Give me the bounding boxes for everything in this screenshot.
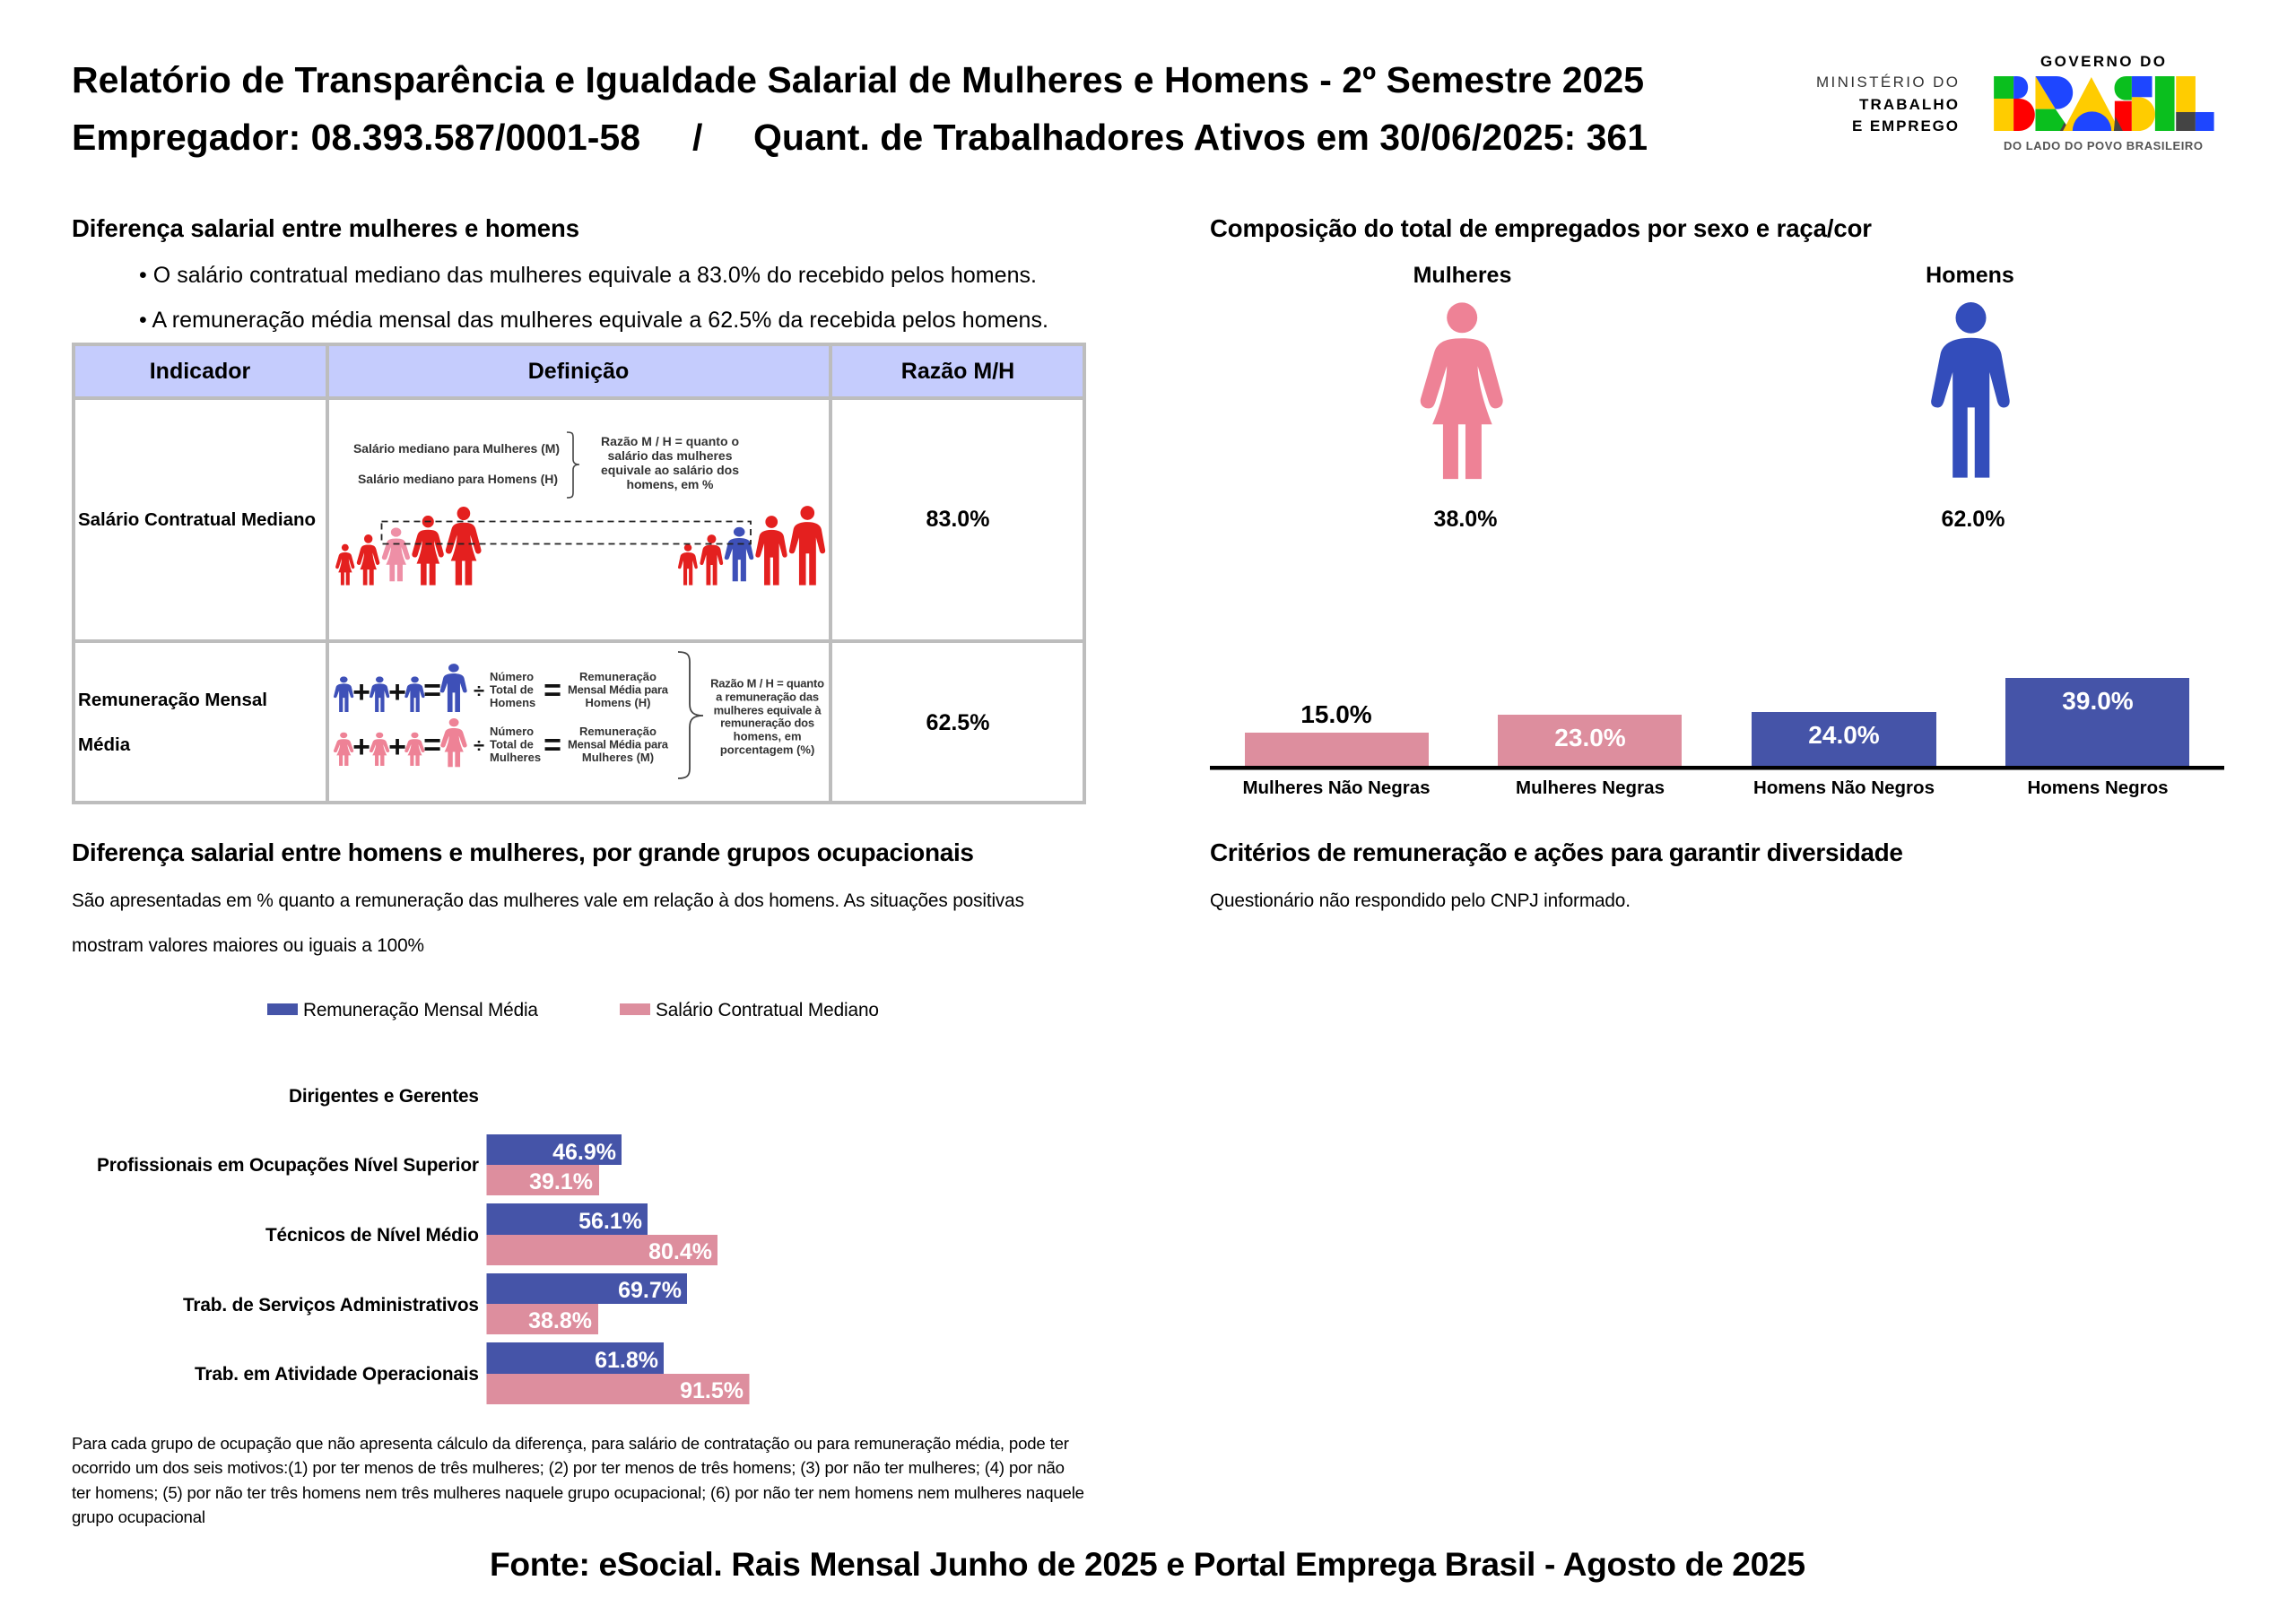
bar chart: sexo e raça/cor: Mulheres Não Negras — [1243, 777, 1430, 798]
data labels: 80.4% — [648, 1239, 712, 1264]
footnote — [72, 1434, 1084, 1526]
definition illustration: remuneração média: = — [544, 673, 561, 708]
logo: Ministério do Trabalho e Emprego / Governo do Brasil: DO LADO DO POVO BRASILEIRO — [2004, 139, 2203, 152]
heading: critérios: Critérios de remuneração e ações para garantir diversidade — [1210, 838, 1903, 866]
icon group: mulheres — [1413, 263, 1511, 532]
table header — [150, 359, 1014, 384]
definition illustration: remuneração média: remuneração dos — [720, 716, 814, 730]
bar chart: sexo e raça/cor: 15.0% — [1300, 700, 1372, 728]
definition illustration: salário mediano: Razão M / H = quanto o — [601, 434, 739, 448]
definition illustration: salário mediano: Salário mediano para Mulheres (M) — [353, 441, 560, 456]
bar chart: sexo e raça/cor: 23.0% — [1554, 724, 1626, 751]
data labels: 38.8% — [528, 1308, 592, 1333]
definition illustration: remuneração média: + — [352, 730, 370, 764]
row value: 62.5%: 62.5% — [926, 710, 989, 735]
data labels: 61.8% — [595, 1348, 658, 1373]
definition illustration: remuneração média: Mensal Média para — [568, 737, 669, 751]
definition illustration: remuneração média: + — [388, 730, 406, 764]
logo: Ministério do Trabalho e Emprego / Governo do Brasil: MINISTÉRIO DO — [1816, 74, 1958, 91]
footnote: ocorrido um dos seis motivos:(1) por ter menos de três mulheres; (2) por ter menos de três homens; (3) por não ter mulheres; (4) por não — [72, 1458, 1065, 1477]
definition illustration: remuneração média: Número — [490, 725, 534, 738]
bar chart: sexo e raça/cor — [1210, 678, 2224, 798]
definition illustration: remuneração média: ÷ — [474, 680, 484, 702]
data labels: 91.5% — [680, 1378, 744, 1403]
logo: Ministério do Trabalho e Emprego / Governo do Brasil: GOVERNO DO — [2040, 53, 2165, 70]
bars — [486, 1134, 750, 1404]
icon group: homens — [1926, 263, 2014, 532]
source line: Fonte: eSocial. Rais Mensal Junho de 2025 e Portal Emprega Brasil - Agosto de 2025 — [490, 1545, 1805, 1583]
data labels: 39.1% — [529, 1169, 593, 1194]
table: indicadores — [72, 343, 1086, 804]
title: Quant. de Trabalhadores Ativos em 30/06/2025: 361 — [753, 117, 1648, 158]
logo: Ministério do Trabalho e Emprego / Governo do Brasil: E EMPREGO — [1852, 117, 1958, 135]
definition illustration: salário mediano: Salário mediano para Homens (H) — [358, 472, 558, 486]
definition illustration: salário mediano: equivale ao salário dos — [601, 463, 739, 477]
definition illustration: remuneração média: Total de — [490, 737, 534, 751]
heading: grupos ocupacionais: Diferença salarial entre homens e mulheres, por grande grupos ocupacionais — [72, 838, 974, 866]
row labels: Técnicos de Nível Médio — [265, 1225, 479, 1246]
title: Relatório de Transparência e Igualdade Salarial de Mulheres e Homens - 2º Semestre 2025 — [72, 59, 1644, 100]
footnote: grupo ocupacional — [72, 1507, 205, 1526]
data labels — [528, 1140, 744, 1403]
heading: diferença salarial: Diferença salarial entre mulheres e homens — [72, 214, 579, 242]
row labels: Dirigentes e Gerentes — [289, 1086, 479, 1107]
text block: bullets: • A remuneração média mensal das mulheres equivale a 62.5% da recebida pelos homens. — [139, 308, 1048, 333]
bar chart: sexo e raça/cor: Homens Não Negros — [1753, 777, 1935, 798]
bar chart: sexo e raça/cor: 39.0% — [2062, 687, 2134, 715]
definition illustration: remuneração média: Total de — [490, 683, 534, 696]
definition illustration: remuneração média: mulheres equivale à — [714, 703, 822, 717]
row label: remuneração mensal média: Remuneração Mensal — [78, 690, 267, 710]
definition illustration: salário mediano — [335, 432, 825, 586]
icon group: mulheres: 38.0% — [1434, 507, 1497, 532]
definition illustration: remuneração média: Mulheres (M) — [582, 751, 654, 764]
definition illustration: remuneração média: + — [388, 675, 406, 709]
definition illustration: remuneração média: Razão M / H = quanto — [710, 676, 824, 690]
icon group: homens: 62.0% — [1942, 507, 2005, 532]
text block: bullets — [139, 263, 1048, 333]
text block: explicação — [72, 890, 1024, 956]
title: Empregador: 08.393.587/0001-58 — [72, 117, 640, 158]
logo: Ministério do Trabalho e Emprego / Governo do Brasil — [1816, 53, 2214, 152]
row labels: Trab. de Serviços Administrativos — [183, 1295, 479, 1316]
icon group: mulheres: Mulheres — [1413, 263, 1511, 288]
table header: Razão M/H — [901, 359, 1014, 384]
horizontal bar chart: grupos ocupacionais — [97, 1086, 750, 1404]
definition illustration: remuneração média: homens, em — [734, 730, 802, 743]
logo: Ministério do Trabalho e Emprego / Governo do Brasil: TRABALHO — [1859, 96, 1958, 113]
definition illustration: remuneração média: = — [423, 728, 441, 762]
definition illustration: remuneração média: Remuneração — [579, 670, 657, 683]
title: / — [692, 117, 702, 158]
row labels: Trab. em Atividade Operacionais — [195, 1364, 479, 1385]
row label: remuneração mensal média — [78, 690, 267, 755]
row value: 83.0%: 83.0% — [926, 507, 989, 532]
definition illustration: remuneração média: Homens — [490, 696, 535, 709]
legend: Remuneração Mensal Média — [303, 1000, 538, 1020]
bar chart: sexo e raça/cor: Mulheres Negras — [1516, 777, 1665, 798]
definition illustration: remuneração média: ÷ — [474, 734, 484, 757]
definition illustration: remuneração média: Número — [490, 670, 534, 683]
definition illustration: remuneração média: a remuneração das — [716, 690, 819, 703]
heading: composição: Composição do total de empregados por sexo e raça/cor — [1210, 214, 1872, 242]
icon group: homens: Homens — [1926, 263, 2014, 288]
definition illustration: remuneração média — [334, 652, 824, 778]
legend — [267, 1000, 879, 1020]
bar chart: sexo e raça/cor: 24.0% — [1808, 721, 1880, 749]
row label: salário contratual mediano: Salário Contratual Mediano — [78, 509, 316, 530]
footnote: ter homens; (5) por não ter três homens nem três mulheres naquele grupo ocupacional; (6) por não ter nem homens nem mulheres naquele — [72, 1483, 1084, 1502]
footnote: Para cada grupo de ocupação que não apresenta cálculo da diferença, para salário de contratação ou para remuneração média, pode ter — [72, 1434, 1069, 1453]
data labels: 46.9% — [552, 1140, 616, 1165]
text block: explicação: São apresentadas em % quanto a remuneração das mulheres vale em relação à dos homens. As situações positivas — [72, 890, 1024, 911]
legend: Salário Contratual Mediano — [656, 1000, 879, 1020]
definition illustration: remuneração média: Homens (H) — [586, 696, 650, 709]
text block: questionário: Questionário não respondido pelo CNPJ informado. — [1210, 890, 1631, 911]
definition illustration: remuneração média: porcentagem (%) — [720, 743, 814, 757]
title — [72, 59, 1648, 158]
table header: Definição — [528, 359, 629, 384]
row labels — [97, 1086, 479, 1385]
table header: Indicador — [150, 359, 251, 384]
definition illustration: remuneração média: Mulheres — [490, 751, 541, 764]
data labels: 56.1% — [578, 1209, 642, 1234]
definition illustration: remuneração média: = — [423, 673, 441, 708]
bar chart: sexo e raça/cor: Homens Negros — [2027, 777, 2169, 798]
row label: remuneração mensal média: Média — [78, 734, 131, 755]
data labels: 69.7% — [618, 1278, 682, 1303]
definition illustration: salário mediano: salário das mulheres — [608, 448, 733, 463]
text block: bullets: • O salário contratual mediano das mulheres equivale a 83.0% do recebido pelos homens. — [139, 263, 1037, 288]
definition illustration: salário mediano: homens, em % — [626, 477, 714, 491]
definition illustration: remuneração média: + — [352, 675, 370, 709]
definition illustration: remuneração média: Mensal Média para — [568, 683, 669, 696]
definition illustration: remuneração média: = — [544, 728, 561, 762]
row labels: Profissionais em Ocupações Nível Superior — [97, 1155, 479, 1176]
text block: explicação: mostram valores maiores ou iguais a 100% — [72, 935, 424, 956]
definition illustration: remuneração média: Remuneração — [579, 725, 657, 738]
